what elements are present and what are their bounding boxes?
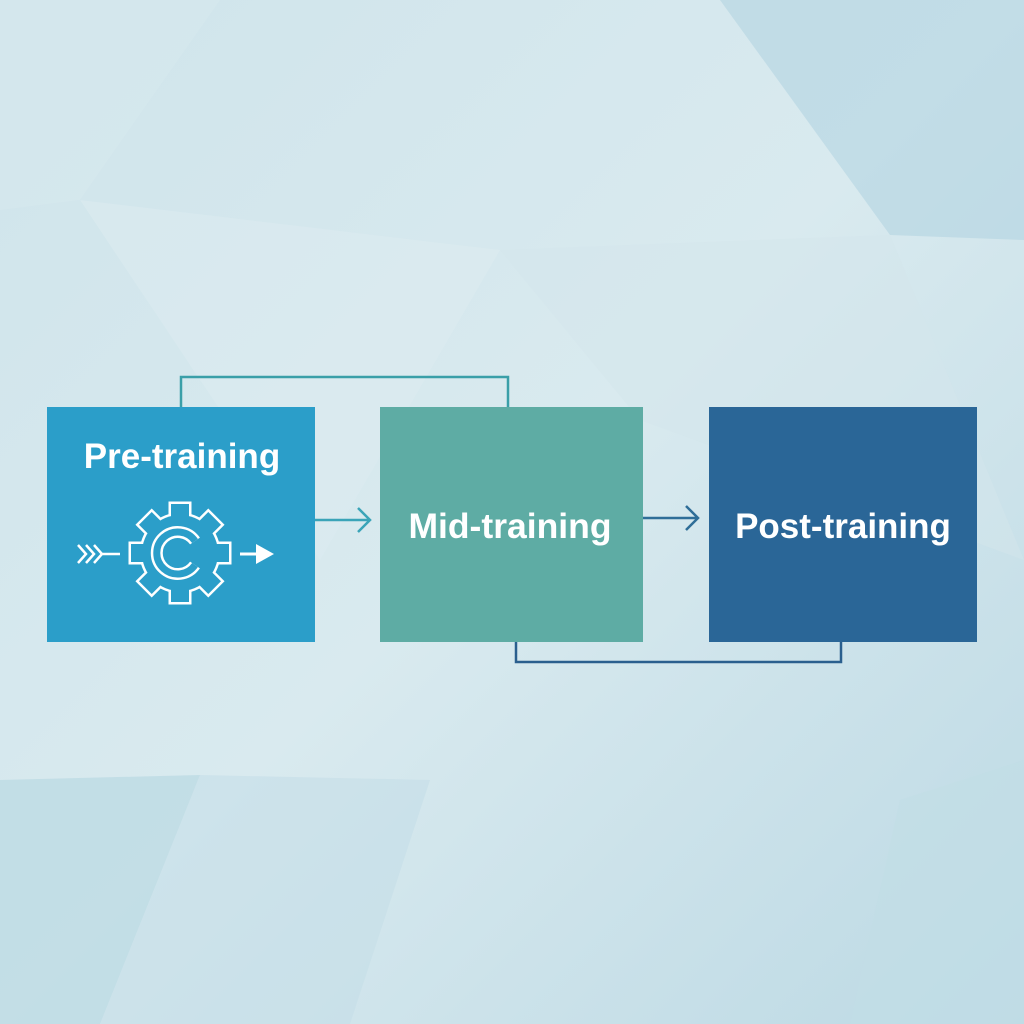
- connector: bottom bracket: [516, 642, 841, 662]
- icon: gear with arrows: [78, 504, 274, 602]
- heading: Pre-training: Pre-training: [84, 437, 280, 476]
- box: Pre-training: [47, 407, 315, 642]
- arrow: pre to mid: [315, 508, 370, 532]
- arrow: mid to post: [643, 506, 698, 530]
- box: Mid-training: [380, 407, 643, 642]
- box: Post-training: [709, 407, 977, 642]
- box: Post-training: Post-training: [735, 507, 951, 546]
- connector: top bracket: [181, 377, 508, 407]
- box: Mid-training: Mid-training: [408, 506, 612, 546]
